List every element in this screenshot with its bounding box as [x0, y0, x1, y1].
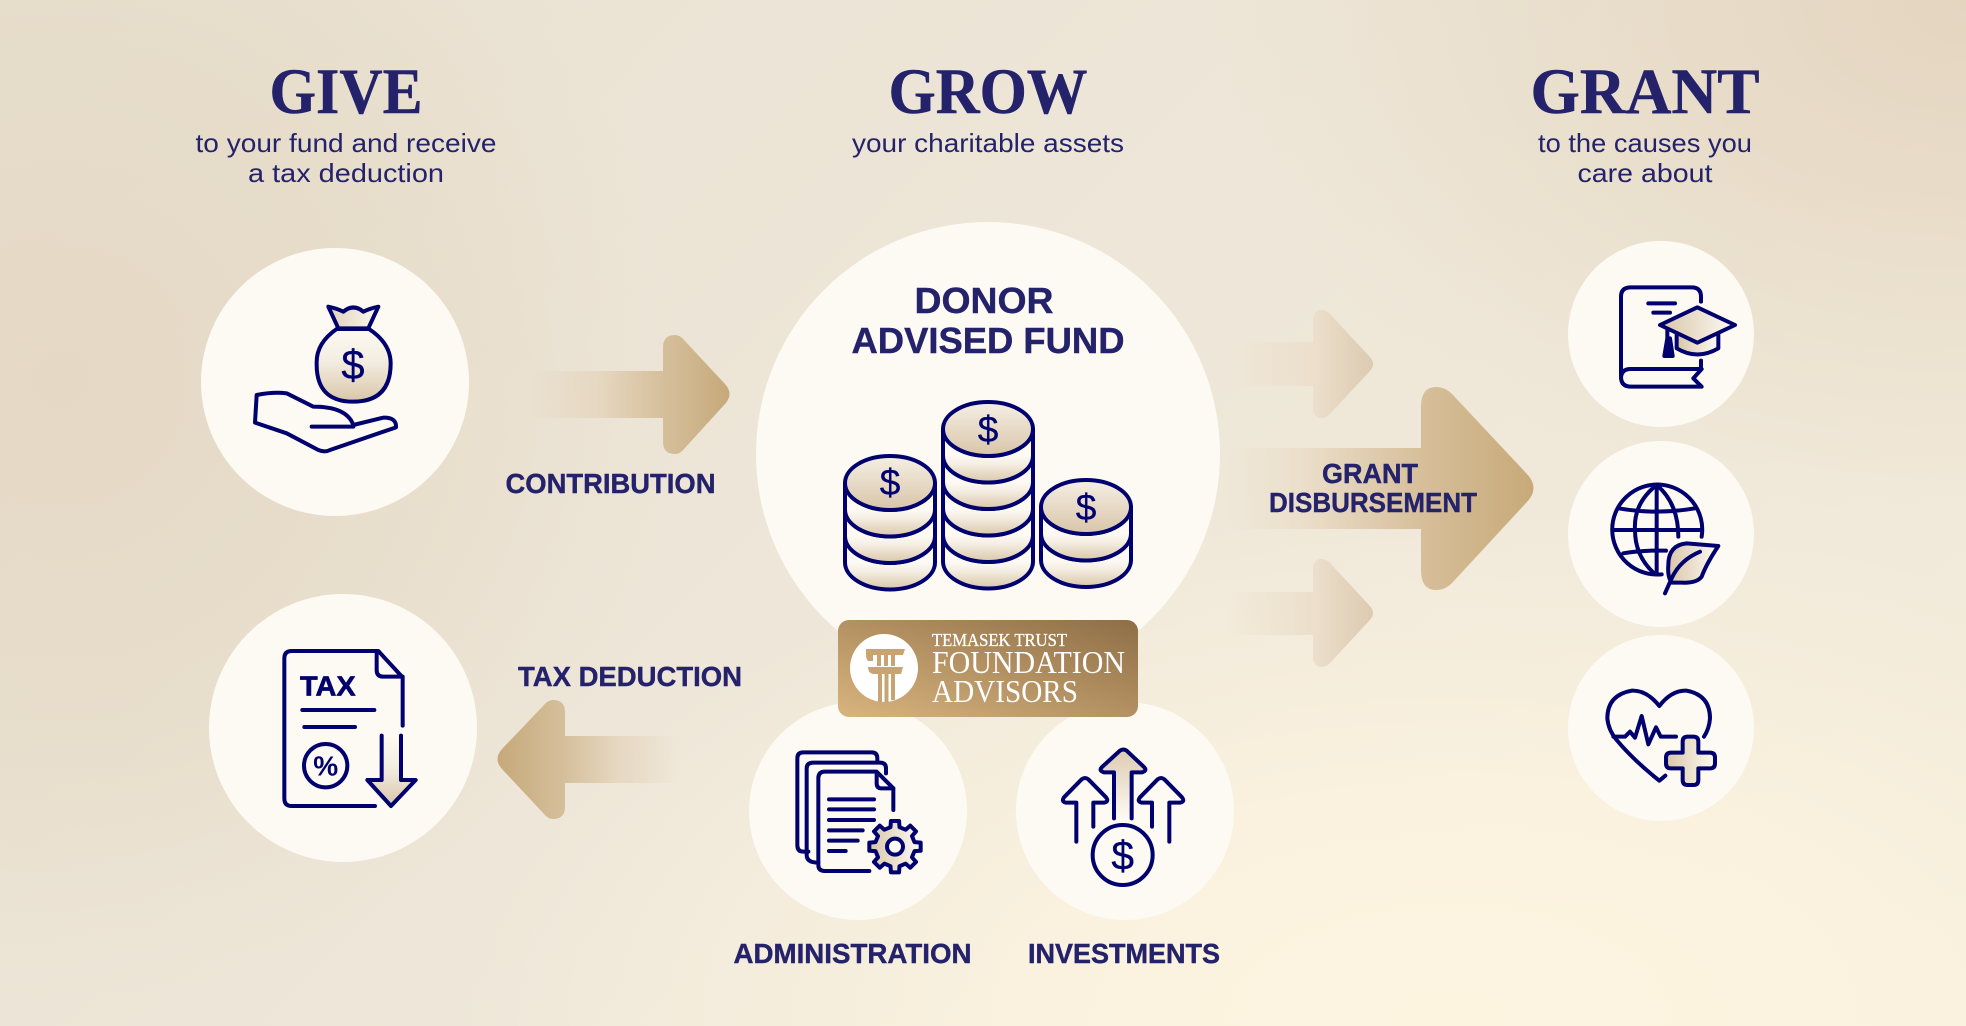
title: grow: GROW: [888, 56, 1088, 128]
icon: tax document: [284, 651, 416, 806]
panel: donor advised fund: [756, 222, 1220, 686]
panel: tax circle: [209, 594, 477, 862]
icon: book and graduation cap: [1621, 287, 1735, 387]
label: tax deduction: TAX DEDUCTION: [518, 661, 742, 692]
icon: globe and leaf: [1612, 485, 1718, 593]
label: administration: ADMINISTRATION: [734, 938, 972, 969]
title: give: to your fund and receive: [196, 128, 496, 158]
arrow: upper grant: [1225, 310, 1373, 418]
icon: tax document: TAX: [300, 671, 356, 702]
heading: donor advised fund: [852, 280, 1124, 361]
title: give: GIVE: [270, 56, 422, 128]
title: give: [196, 56, 496, 188]
icon: coin stacks: $: [1076, 487, 1096, 528]
heading: donor advised fund: ADVISED FUND: [852, 320, 1124, 361]
panel: education circle: [1568, 241, 1754, 427]
title: grant: [1530, 56, 1760, 188]
icon: hand with money bag: [255, 307, 396, 451]
logo: temasek trust foundation advisors: [838, 620, 1138, 717]
arrow: grant disbursement: [1225, 387, 1534, 590]
icon: coin stacks: [845, 402, 1131, 590]
panel: health circle: [1568, 635, 1754, 821]
panel: environment circle: [1568, 441, 1754, 627]
logo: temasek trust foundation advisors: FOUNDATION: [932, 644, 1125, 680]
icon: rising arrows and coin: $: [1111, 832, 1134, 878]
panel: give circle: [201, 248, 469, 516]
arrow: contribution: [530, 335, 730, 454]
icon: coin stacks: $: [880, 462, 900, 503]
label: grant disbursement: DISBURSEMENT: [1269, 487, 1477, 518]
panel: investments circle: [1016, 702, 1234, 920]
heading: donor advised fund: DONOR: [914, 280, 1054, 321]
title: grant: GRANT: [1530, 56, 1760, 128]
icon: rising arrows and coin: [1063, 749, 1183, 885]
icon: coin stacks: $: [978, 409, 998, 450]
logo: temasek trust foundation advisors: ADVISORS: [932, 673, 1078, 709]
label: grant disbursement: [1269, 458, 1477, 518]
label: investments: INVESTMENTS: [1028, 938, 1220, 969]
icon: tax document: %: [313, 751, 338, 782]
arrow: tax deduction: [498, 700, 680, 819]
icon: heart with plus: [1607, 691, 1715, 785]
arrow: lower grant: [1225, 559, 1373, 667]
title: grow: [852, 56, 1124, 158]
icon: documents and gear: [797, 752, 921, 872]
title: grant: to the causes you: [1538, 128, 1752, 158]
title: grow: your charitable assets: [852, 128, 1124, 158]
title: give: a tax deduction: [248, 158, 444, 188]
logo: temasek trust foundation advisors: TEMASEK TRUST: [932, 630, 1067, 650]
icon: hand with money bag: $: [341, 341, 365, 388]
title: grant: care about: [1578, 158, 1713, 188]
logo mark: column: [850, 634, 918, 702]
label: contribution: CONTRIBUTION: [506, 468, 716, 499]
panel: administration circle: [749, 702, 967, 920]
label: grant disbursement: GRANT: [1322, 458, 1418, 489]
